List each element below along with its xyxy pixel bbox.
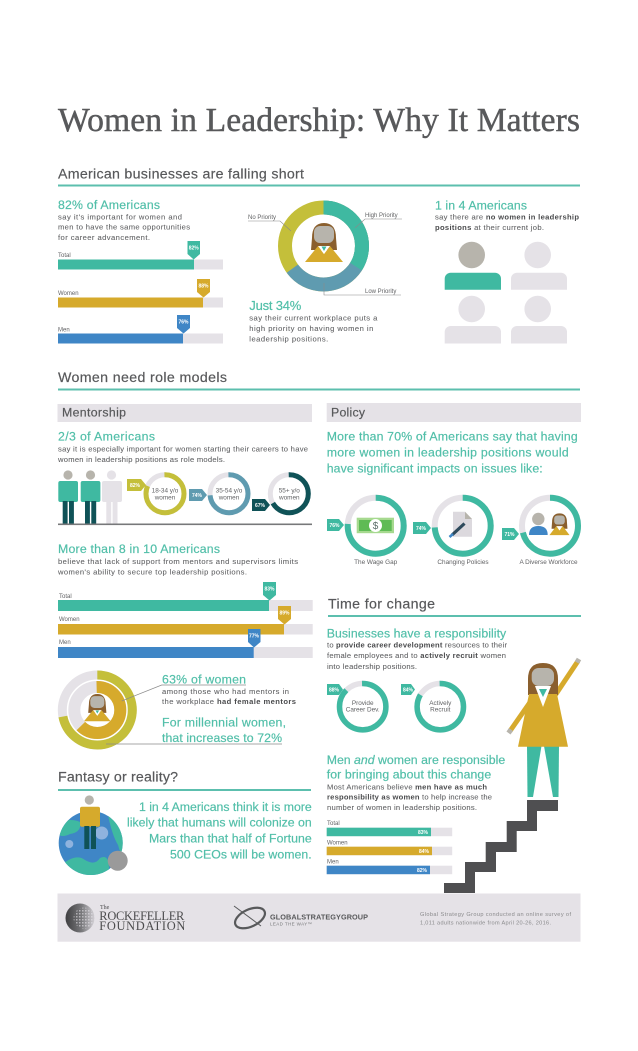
bar: women 88% (58, 279, 223, 308)
bar: women 84%: 84% (419, 849, 430, 855)
text: more than 70% of Americans (327, 430, 578, 475)
chart: a diverse workforce 71%: 71% (504, 532, 515, 538)
text: more than 70% of Americans: More than 70% of Americans say that having (327, 430, 578, 444)
bar: total 83%: Total (59, 594, 72, 600)
bar: total 83%: 83% (264, 586, 275, 592)
chart: 18-34 y/o women 82%: 18-34 y/o (152, 487, 179, 494)
bar: men 76%: 76% (178, 320, 189, 326)
bar: total 82%: 82% (189, 246, 199, 252)
chart: 18-34 y/o women 82%: women (154, 494, 176, 501)
panel: 82% of Americans: for career advancement. (58, 233, 150, 242)
icon: woman (305, 223, 343, 262)
panel: men and women are responsible: Most Americans believe men have as much (327, 782, 487, 791)
bar: total 82%: Total (58, 253, 71, 259)
text: 1 in 4 Americans Mars claim: likely that humans will colonize on (127, 816, 312, 830)
logo: Global Strategy Group: GLOBALSTRATEGYGROUP (270, 912, 368, 921)
chart: 35-54 y/o women 74%: 35-54 y/o (216, 487, 243, 494)
panel: 1 in 4 Americans: say there are no women in leadership (435, 212, 579, 222)
text: 2/3 of Americans: women in leadership positions as role models. (57, 455, 225, 464)
icon: man and woman (529, 513, 570, 535)
bar: men 77%: 77% (249, 634, 260, 640)
text: businesses have a responsibility (327, 627, 507, 671)
text: survey note: Global Strategy Group conducted an online survey of (420, 912, 571, 918)
chart: 55+ y/o women 67%: 67% (255, 503, 266, 509)
text: more than 70% of Americans: have significant impacts on issues like: (327, 461, 543, 475)
text: just 34%: say their current workplace puts a (249, 314, 378, 323)
bar: men 76%: Men (58, 328, 70, 334)
text: businesses have a responsibility: female employees and to actively recruit women (327, 651, 506, 660)
panel: 1 in 4 Americans: 1 in 4 Americans (435, 198, 527, 212)
bar: women 89%: Women (59, 617, 80, 623)
text: 63% of women: the workplace had female mentors (162, 697, 296, 706)
section: Time for change: Time for change (328, 596, 435, 612)
text: just 34% (249, 298, 378, 344)
chart: 55+ y/o women 67%: 55+ y/o (279, 487, 300, 494)
panel: men and women are responsible: number of women in leadership positions. (327, 803, 477, 812)
icon: document and pen (450, 512, 472, 537)
chart: changing policies 74% (413, 498, 491, 566)
panel: mentorship header: Mentorship (62, 406, 126, 420)
chart: provide career dev 88%: Provide (352, 700, 374, 707)
label: high priority: High Priority (365, 213, 398, 219)
panel: 82% of Americans (58, 198, 223, 344)
chart: the wage gap 76%: The Wage Gap (354, 559, 398, 566)
bar: men 82%: Men (327, 860, 339, 866)
chart: the wage gap 76%: 76% (329, 523, 340, 529)
bar: total 83%: Total (327, 821, 340, 827)
icon: four people (445, 242, 567, 344)
panel: 1 in 4 Americans: positions at their current job. (435, 223, 544, 232)
chart: 35-54 y/o women 74%: 74% (192, 493, 203, 499)
logo: The Rockefeller Foundation (66, 904, 185, 933)
footer (58, 894, 580, 942)
panel: 82% of Americans: men to have the same opportunities (58, 223, 190, 232)
icon: dollar bill: $ (373, 521, 379, 532)
text: 63% of women: For millennial women, (162, 716, 286, 730)
panel: men and women are responsible: for bringing about this change (327, 767, 491, 781)
bar: total 83%: 83% (418, 830, 429, 836)
chart: priority donut (248, 208, 402, 295)
icon: woman (84, 694, 111, 721)
panel: 82% of Americans: say it's important for women and (58, 212, 182, 222)
logo: The Rockefeller Foundation: FOUNDATION (99, 919, 185, 933)
text: businesses have a responsibility: to provide career development resources to their (327, 641, 507, 650)
bar: women 88%: Women (58, 291, 79, 297)
chart: 18-34 y/o women 82%: 82% (130, 483, 141, 489)
text: just 34%: Just 34% (249, 298, 302, 313)
bar: men 77% (58, 629, 313, 658)
logo: Global Strategy Group: LEAD THE WAY™ (270, 922, 312, 926)
chart: provide career dev 88%: Career Dev. (346, 707, 380, 714)
text: 1 in 4 Americans Mars claim (127, 800, 312, 861)
panel: more than 8 in 10 Americans (57, 542, 313, 658)
label: no priority: No Priority (248, 215, 276, 221)
chart: a diverse workforce 71% (502, 498, 578, 566)
icon: woman climbing stairs (508, 659, 579, 797)
text: survey note (420, 912, 571, 926)
title: Women in Leadership: Why It Matters (58, 102, 580, 139)
bar: men 82%: 82% (417, 868, 428, 874)
label: low priority (324, 283, 401, 295)
bar: men 76% (58, 315, 223, 344)
text: 2/3 of Americans (57, 430, 308, 464)
panel: men and women are responsible (327, 753, 505, 874)
section: Women need role models: Women need role models (58, 370, 227, 386)
text: businesses have a responsibility: Businesses have a responsibility (327, 627, 507, 641)
chart: actively recruit 84%: Actively (429, 700, 452, 707)
chart: 55+ y/o women 67% (252, 475, 308, 513)
bar: total 83% (58, 582, 313, 611)
icon: person standing on globe with moon (58, 795, 128, 880)
bar: women 89% (58, 606, 313, 634)
chart: the wage gap 76% (327, 498, 404, 566)
logo: The Rockefeller Foundation: The (100, 905, 110, 911)
chart: female mentors double donut (62, 675, 282, 745)
text: just 34%: leadership positions. (249, 334, 328, 344)
panel: more than 8 in 10 Americans: women's ability to secure top leadership positions. (57, 568, 247, 576)
chart: provide career dev 88% (327, 684, 386, 730)
text: businesses have a responsibility: into leadership positions. (327, 662, 417, 671)
chart: actively recruit 84%: 84% (403, 688, 414, 694)
icon: stairs (444, 800, 558, 893)
label: low priority: Low Priority (365, 289, 396, 295)
chart: provide career dev 88%: 88% (329, 688, 340, 694)
panel: more than 8 in 10 Americans: believe that lack of support from mentors and supervisors limits (58, 557, 298, 566)
panel: mentorship header (58, 404, 312, 422)
text: survey note: 1,011 adults nationwide from April 20-26, 2016. (420, 920, 551, 926)
chart: 55+ y/o women 67%: women (278, 494, 300, 501)
chart: 35-54 y/o women 74%: women (218, 494, 240, 501)
chart: changing policies 74%: Changing Policies (437, 559, 489, 566)
panel: policy header (327, 403, 581, 422)
text: 63% of women: 63% of women (162, 672, 246, 686)
bar: women 84% (327, 840, 452, 855)
chart: 35-54 y/o women 74% (189, 475, 248, 513)
text: more than 70% of Americans: more women in leadership positions would (327, 446, 569, 460)
bar: men 82% (327, 860, 452, 874)
panel: 1 in 4 Americans (435, 198, 579, 344)
text: 2/3 of Americans: say it is especially important for women starting their careers to have (58, 445, 308, 454)
icon: three people figures (58, 470, 312, 525)
chart: changing policies 74%: 74% (416, 526, 427, 532)
panel: more than 8 in 10 Americans: More than 8 in 10 Americans (58, 542, 220, 556)
chart: 18-34 y/o women 82% (127, 475, 184, 513)
text: just 34%: high priority on having women in (249, 324, 373, 333)
bar: women 89%: 89% (279, 610, 290, 616)
panel: men and women are responsible: Men and women are responsible (327, 753, 505, 767)
text: 2/3 of Americans: 2/3 of Americans (58, 430, 155, 444)
logo: Global Strategy Group (232, 904, 368, 932)
label: no priority (248, 215, 291, 231)
chart: a diverse workforce 71%: A Diverse Workforce (519, 559, 578, 566)
bar: total 82% (58, 241, 223, 270)
text: 1 in 4 Americans Mars claim: 500 CEOs will be women. (170, 847, 312, 861)
text: 63% of women (162, 672, 296, 745)
logo: The Rockefeller Foundation: ROCKEFELLER (99, 909, 185, 923)
chart: actively recruit 84% (401, 684, 464, 730)
bar: women 84%: Women (327, 840, 348, 846)
panel: policy header: Policy (331, 406, 366, 420)
bar: total 83% (327, 821, 452, 836)
section: American businesses are falling short: American businesses are falling short (58, 166, 304, 182)
label: high priority (355, 213, 402, 228)
panel: men and women are responsible: responsibility as women to help increase the (327, 792, 492, 801)
panel: 82% of Americans: 82% of Americans (58, 198, 160, 212)
text: 1 in 4 Americans Mars claim: Mars than that half of Fortune (149, 832, 312, 846)
section: Fantasy or reality?: Fantasy or reality? (58, 770, 178, 786)
bar: women 88%: 88% (198, 284, 209, 290)
text: 63% of women: among those who had mentors in (162, 687, 289, 696)
chart: actively recruit 84%: Recruit (430, 707, 451, 714)
text: 63% of women: that increases to 72% (162, 731, 282, 745)
text: 1 in 4 Americans Mars claim: 1 in 4 Americans think it is more (139, 800, 312, 814)
bar: men 77%: Men (59, 640, 71, 646)
